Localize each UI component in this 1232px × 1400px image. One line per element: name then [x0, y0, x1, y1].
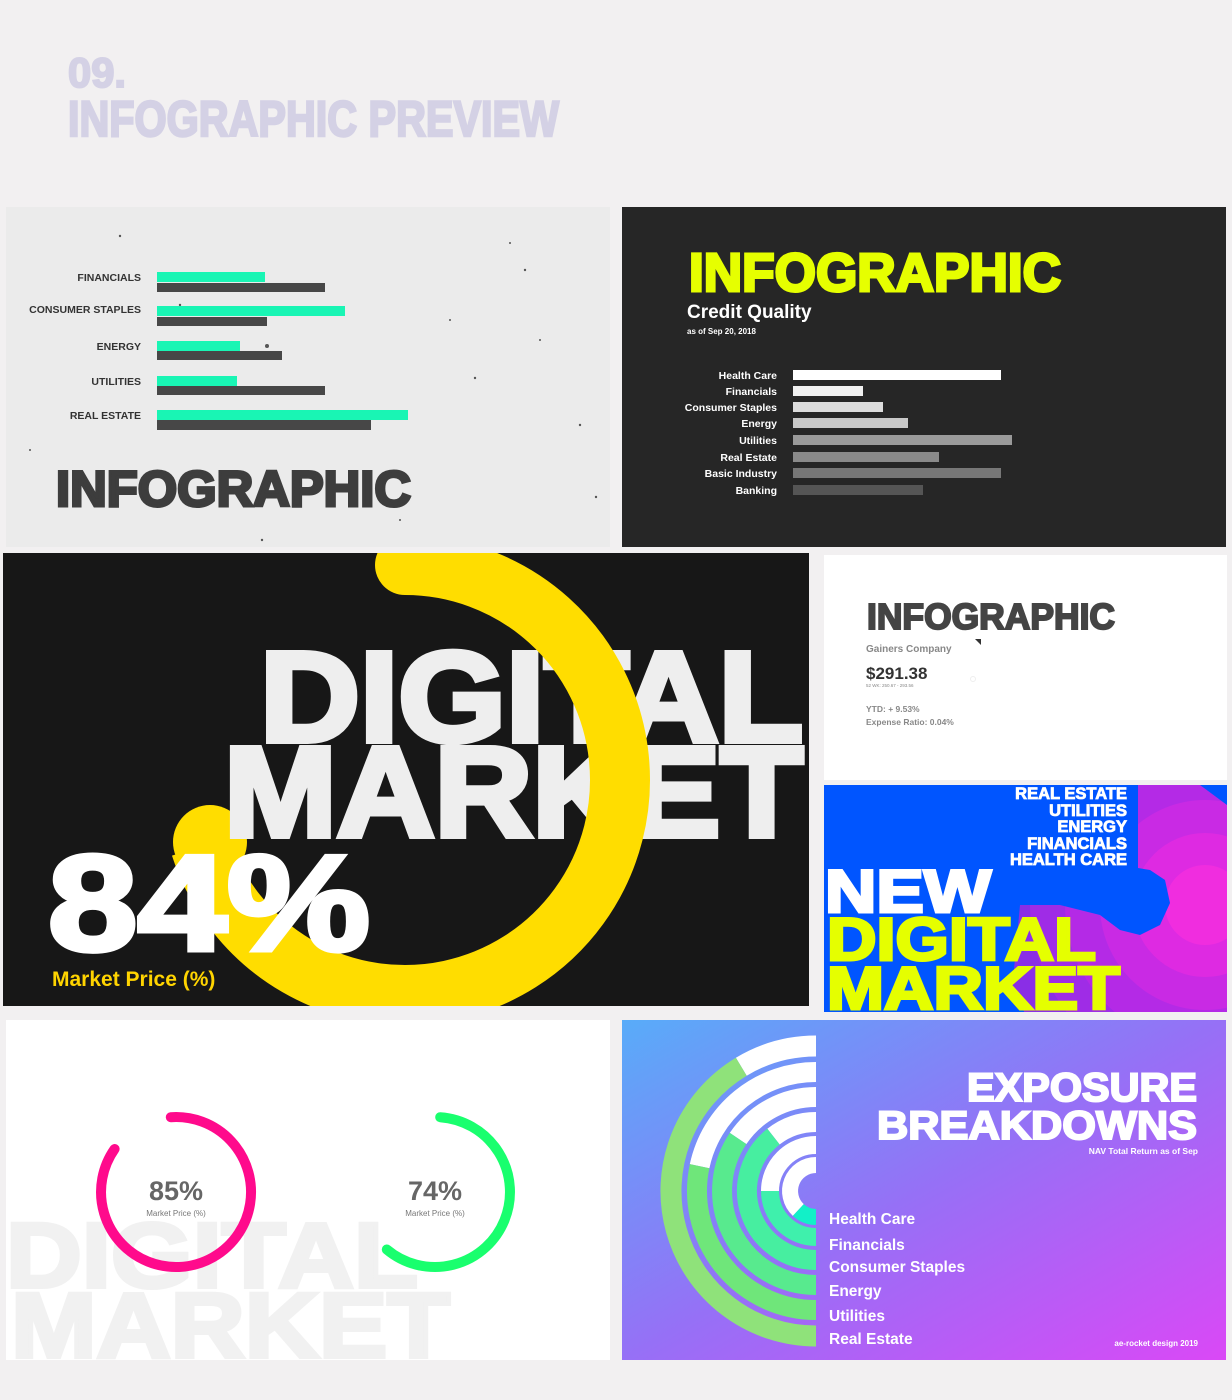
bar chart labels: FINANCIALS — [77, 272, 141, 284]
panel 1 title: INFOGRAPHIC — [56, 461, 411, 517]
concentric circles — [1012, 785, 1227, 1012]
legend labels: Utilities — [829, 1308, 885, 1325]
legend labels: Financials — [829, 1237, 905, 1254]
legend labels: Consumer Staples — [829, 1259, 965, 1276]
credit bar labels: Basic Industry — [705, 468, 777, 480]
caption: Market Price (%) — [52, 968, 215, 991]
panel 3: digital market 84%: MARKET — [224, 721, 803, 864]
bar chart labels: ENERGY — [97, 341, 141, 353]
panel 7: exposure breakdowns: BREAKDOWNS — [877, 1104, 1197, 1148]
header: section number: 09. — [68, 49, 126, 96]
panel 2: credit quality: as of Sep 20, 2018 — [687, 327, 756, 336]
credit bar labels: Financials — [726, 386, 777, 398]
panel 4: gainers company: Expense Ratio: 0.04% — [866, 717, 954, 727]
bar chart labels: UTILITIES — [91, 376, 141, 388]
credit bar labels: Energy — [741, 418, 777, 430]
credit: ae-rocket design 2019 — [1114, 1339, 1199, 1348]
NEW DIGITAL MARKET heading: NEW — [825, 858, 991, 925]
credit bar labels: Health Care — [719, 370, 777, 382]
panel 5: new digital market: MARKET — [827, 955, 1120, 1022]
gauge 74%: 74% — [408, 1176, 462, 1206]
panel 4: gainers company — [824, 555, 1227, 780]
credit bar labels: Banking — [736, 485, 777, 497]
panel 4: gainers company: Gainers Company — [866, 644, 952, 655]
stats: YTD: + 9.53% — [866, 704, 920, 714]
legend labels — [829, 1211, 965, 1348]
84% value: 84% — [48, 827, 370, 979]
background words: DIGITAL — [6, 1205, 418, 1307]
gauge 85%: Market Price (%) — [146, 1209, 206, 1218]
legend labels: Energy — [829, 1283, 882, 1300]
price: $291.38 — [866, 664, 927, 683]
panel 6: donut gauges — [6, 1020, 610, 1377]
yellow ring arc — [200, 565, 620, 995]
credit bars — [793, 370, 1012, 495]
credit bar labels — [685, 370, 777, 497]
bar chart labels: REAL ESTATE — [70, 410, 141, 422]
panel 4 title: INFOGRAPHIC — [867, 596, 1115, 637]
panel 7: exposure breakdowns: NAV Total Return as of Sep — [1089, 1146, 1198, 1156]
panel 2: credit quality — [622, 207, 1226, 547]
DIGITAL MARKET heading: DIGITAL — [260, 626, 803, 769]
gauge 74%: Market Price (%) — [405, 1209, 465, 1218]
bar chart bars — [157, 272, 408, 430]
sector list: FINANCIALS — [1027, 835, 1127, 853]
legend labels: Real Estate — [829, 1331, 913, 1348]
bar chart labels — [29, 272, 141, 422]
sector list: REAL ESTATE — [1015, 785, 1127, 803]
panel 2 title: INFOGRAPHIC — [689, 243, 1061, 303]
panel 1: light bar chart — [6, 207, 610, 547]
subtitle: Credit Quality — [687, 302, 812, 323]
bar chart labels: CONSUMER STAPLES — [29, 304, 141, 316]
sector list: ENERGY — [1057, 818, 1127, 836]
sector list: UTILITIES — [1049, 802, 1127, 820]
yellow cap circle — [173, 805, 247, 859]
panel 5: new digital market — [824, 785, 1227, 1012]
credit bar labels: Utilities — [739, 435, 777, 447]
sector list — [1010, 785, 1127, 869]
gauge 85%: 85% — [149, 1176, 203, 1206]
credit bar labels: Real Estate — [720, 452, 777, 464]
credit bar labels: Consumer Staples — [685, 402, 777, 414]
panel 6: donut gauges: MARKET — [11, 1275, 450, 1377]
legend labels: Health Care — [829, 1211, 916, 1228]
sector list: HEALTH CARE — [1010, 851, 1127, 869]
header: title: INFOGRAPHIC PREVIEW — [68, 91, 560, 147]
gauge 74% — [387, 1117, 510, 1267]
title: EXPOSURE — [967, 1066, 1197, 1110]
half ring chart — [671, 1046, 816, 1336]
panel 4: gainers company: 52 WK: 250.67 - 293.56 — [866, 683, 914, 688]
panel 7: exposure breakdowns — [622, 1020, 1226, 1360]
panel 5: new digital market: DIGITAL — [827, 906, 1096, 973]
gauge 85% — [101, 1117, 251, 1267]
panel 3: digital market 84% — [3, 535, 809, 1006]
